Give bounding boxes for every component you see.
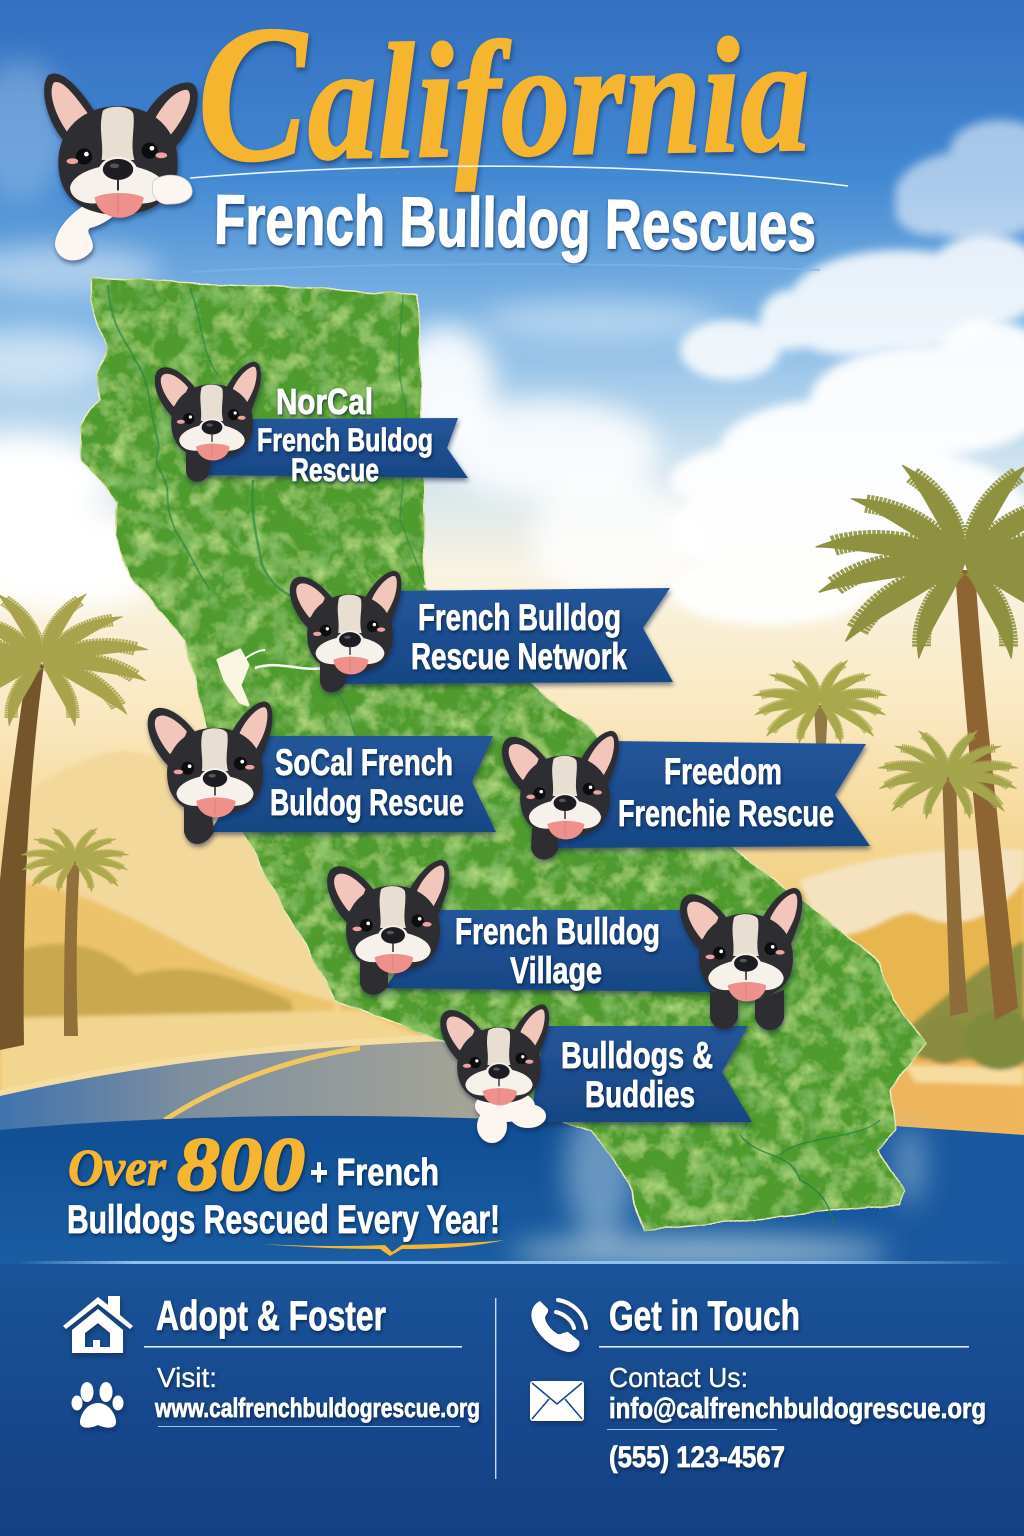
desert hills: right [800, 849, 1024, 1135]
mascot dog: top left [44, 74, 198, 260]
label: Bulldogs & Buddies [440, 1004, 752, 1143]
heading: Get in Touch [609, 1292, 800, 1339]
label: French Bulldog Village [327, 860, 712, 995]
panel: adopt and foster [63, 1292, 480, 1428]
ribbon [210, 736, 496, 832]
name: Bulldogs & [561, 1035, 713, 1076]
ribbon [330, 588, 673, 684]
name: Buddies [585, 1074, 695, 1115]
name: SoCal French [275, 742, 453, 783]
email rule [607, 1429, 777, 1430]
name: Frenchie Rescue [618, 793, 834, 834]
dog [290, 571, 401, 692]
name [561, 1035, 713, 1115]
dog left [327, 860, 449, 995]
ribbon [385, 910, 712, 992]
rivers and bay [108, 285, 880, 1225]
palm trees [0, 456, 1024, 1050]
name: French Bulldog [455, 911, 660, 952]
website rule [158, 1426, 460, 1427]
panel: get in touch [530, 1292, 986, 1474]
gold swoosh [262, 1240, 505, 1256]
map of California [80, 278, 925, 1230]
ocean [0, 1100, 1024, 1270]
dog [155, 362, 261, 482]
subtitle: French Bulldog Rescues: French Bulldog Rescues [214, 180, 817, 266]
dog [148, 701, 272, 844]
footer background [0, 1264, 1024, 1536]
stat: Over 800+ French Bulldogs Rescued Every Year [67, 1123, 505, 1256]
name: Freedom [664, 751, 782, 792]
name [411, 597, 627, 677]
icon: house [63, 1296, 133, 1353]
stat number line: + French [310, 1152, 439, 1194]
subtitle rule [190, 264, 820, 272]
stat number line: Bulldogs Rescued Every Year! [67, 1198, 500, 1242]
ribbon [205, 418, 468, 478]
label: SoCal French Buldog Rescue [148, 701, 496, 844]
icon: paw [72, 1382, 124, 1428]
name [455, 911, 660, 991]
website: www.calfrenchbuldogrescue.org [154, 1393, 480, 1423]
name: Rescue [291, 452, 379, 488]
name [618, 751, 834, 834]
label: NorCal French Buldog Rescue [155, 362, 468, 488]
dog [440, 1004, 549, 1143]
title rule [190, 166, 848, 186]
divider [15, 1261, 1013, 1264]
clouds [0, 60, 1024, 625]
name: French Buldog [257, 422, 433, 458]
label: French Bulldog Rescue Network [290, 571, 673, 692]
name: French Bulldog [418, 597, 621, 638]
stat number line [67, 1123, 500, 1242]
name [257, 381, 433, 488]
road [0, 1033, 480, 1130]
contact text: Contact Us: [609, 1362, 748, 1393]
stat number line: 800 [177, 1123, 305, 1207]
heading rule [144, 1346, 462, 1348]
name: Buldog Rescue [270, 782, 464, 823]
heading rule [599, 1346, 969, 1348]
vertical divider [495, 1298, 496, 1479]
ribbon [530, 1026, 752, 1122]
dog: right side [680, 888, 802, 1030]
name: Rescue Network [411, 636, 627, 677]
icon: envelope [530, 1381, 584, 1421]
ribbon [555, 741, 870, 848]
desert hills: left [0, 751, 430, 1095]
stat number line: Over [68, 1140, 167, 1197]
name: Village [510, 950, 602, 991]
dog [502, 731, 619, 860]
name: NorCal [276, 381, 373, 422]
visit text: Visit: [157, 1362, 217, 1393]
name [270, 742, 464, 823]
heading: Adopt & Foster [156, 1292, 386, 1339]
icon: phone [531, 1300, 586, 1352]
phone number: (555) 123-4567 [609, 1441, 785, 1474]
label: Freedom Frenchie Rescue [502, 731, 870, 860]
